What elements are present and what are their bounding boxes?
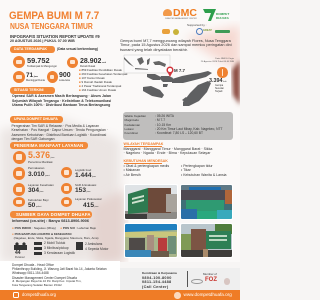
photo 3 [124,224,176,256]
map credit [200,58,234,63]
intro text: Gempa bumi M7,7 mengguncang wilayah Flores, Nusa Tenggara [120,38,231,42]
icon: logistics [61,167,72,178]
DMC wordmark: DMC [173,6,197,18]
heading: SUMBER DAYA DOMPET DHUAFA [16,212,91,217]
panel: kebutuhan mendesak [124,159,226,177]
photo 4 [181,224,232,256]
icon: instagram [12,292,18,298]
list right: • Tikar [181,168,191,172]
member heading: Member of [203,272,217,276]
food label: Permakanan [28,166,44,170]
dmc office: Kota Tangerang Selatan Banten 15412 [12,283,62,287]
psychosocial count: 415 jiwa [83,202,98,209]
list left: • Obat & perlengkapan medis [124,164,169,168]
logistics count: 1.444 jiwa [75,172,96,179]
injured label: Luka-luka [59,78,70,82]
icon: beneficiaries [12,150,26,164]
icon: rescue [61,183,72,194]
posts row: ● POS INDUK : Nagekeo (Mbay) ● POS S/U : Labuhan Bajo [12,226,96,230]
head office: Whatsapp 0811-154-4488 [12,271,49,275]
text [12,94,111,107]
damage list: ■ 164 Fasilitas Umum Rusak [79,88,116,92]
dead count: 71 jiwa [26,72,38,79]
panel: contact footer band [120,268,240,291]
personnel count: 44 [15,250,21,256]
heading: KEBUTUHAN MENDESAK [124,159,168,163]
psychosocial label: Layanan Psikososial [75,197,101,201]
logo 3 [224,278,230,284]
head office [12,262,106,275]
fact labels: Waktu Kejadian [124,114,146,118]
ambulance list: 4 Sepeda Motor [85,247,108,251]
title: GEMPA BUMI M 7.7 [9,10,99,22]
underline [124,162,162,164]
intro text [120,38,232,52]
photo grid [124,184,234,257]
logo: DMC [163,6,197,20]
panel: quake facts [123,112,233,140]
fact values: : 20 Km Timur Laut Mbay, Kab. Nagekeo, NTT [155,127,223,131]
DD wordmark [216,12,230,20]
photo 2 [181,184,232,218]
list left [124,164,169,177]
text [12,124,108,141]
handle: dompetdhuafa.org [22,292,56,297]
map credit: Data: BMKG Origin [215,58,234,60]
text: Sejumlah Wilayah Tergangu · Kelistrikan & Telekomunikasi [12,99,111,103]
heading: DATA TERDAMPAK [14,47,47,51]
fact labels: Kedalaman [124,123,140,127]
background wash [1,25,240,262]
logistics posts: ● POS BANTUAN LOGISTIK & KESEHATAN [12,232,71,236]
heading [10,211,92,218]
ambulance list [85,242,108,251]
dead label: Meninggal Dunia [26,78,45,82]
epicentre label: M 7.7 [174,68,185,72]
list right [181,164,226,177]
food count: 3.010 porsi [28,171,50,178]
shelter label: Kebutuhan Bayi [28,198,48,202]
contact heading: Kemitraan & Kerjasama [142,271,177,275]
heading [10,46,55,53]
personnel label: Personel [15,256,24,258]
panel: wilayah terdampak [124,142,212,155]
text: dengan Tim SAR Gabungan [12,137,54,141]
vehicles list: 3 Kendaraan Logistik [44,251,75,255]
list right: • Perlengkapan tidur [181,164,213,168]
shelter count: 50 paket [28,202,41,209]
logo 2 [173,28,179,34]
heading: UPAYA DOMPET DHUAFA [14,117,58,121]
beneficiaries count: 5.376 jiwa [28,150,54,160]
text: Operasi SAR & Asesmen Masih Berlangsung · Akses Jalan [12,94,111,98]
list right: • Kebutuhan Wanita & Lansia [181,173,226,177]
damage list: ■ 4 Pasar Tradisional Terdampak [79,84,121,88]
logo: Dompet Dhuafa [203,9,230,21]
logistics posts [12,232,98,240]
dmc office: Disaster Management Center Dompet Dhuafa [12,276,77,280]
text [124,147,212,155]
text: Kesehatan · Pos Hangat · Dapur Umum · Tenda Pengungsian · [12,128,108,132]
supported by: Supported by : [187,23,207,27]
fact values: : Koordinat: 7,80 LS – 120,60 BT [155,131,203,135]
note: (Data sesuai berkembang) [57,47,98,51]
aftershock label: Susulan [215,87,224,90]
fact values: : 10-15 Km [155,123,171,127]
health count: 304 jiwa [28,187,43,194]
icon: shelter [12,197,25,207]
icon: DD mark [203,9,216,21]
heading: WILAYAH TERDAMPAK [124,142,163,146]
damage list: ■ 107 Kantor Rusak [79,76,105,80]
website: www.dompetdhuafa.org [184,292,232,297]
list left: • Air Bersih [124,173,141,177]
intro text: Timur, pada 15 Agustus 2026 dan sampai memicu peringatan dini [120,43,232,47]
health label: Layanan Kesehatan [28,182,54,186]
dmc office: Jl. Menjangan Raya No.10 Pd. Ranji Kec. Ciputat Tim, [12,279,81,283]
heading [10,116,63,122]
aftershock label [215,84,224,93]
panel: sumber daya [10,211,108,258]
photo 1 [124,184,176,218]
vehicles list [44,241,75,255]
underline [124,145,162,148]
icon: injured [46,71,58,83]
displaced count: 59.752 [27,56,50,65]
damage list: ■ 9 Rumah Ibadah Rusak [79,80,112,84]
contact numbers: 0811-154-4488 [142,280,171,284]
sponsor logos [162,28,230,35]
logo 3 text: GREAT [203,29,212,32]
intro text: tsunami yang telah dinyatakan berakhir. [120,48,188,52]
icon: aftershock [217,67,228,78]
map credit: 20 Agustus 2026 Pukul 06.00 WIB [201,61,234,63]
contact numbers: 0804-100-8000 [142,276,172,280]
heading [10,142,88,149]
heading [10,87,55,94]
icon: personnel [14,242,27,250]
head office: Philanthropy Building, Jl. Warung Jati Barat No.14, Jakarta Selatan [12,267,106,271]
inset map [124,55,170,73]
DMC tagline: DISASTER MANAGEMENT CENTER [165,18,197,20]
icon: displaced [13,56,25,68]
logo 2: FOZ [205,277,217,283]
fact values: : 05:26 WITA [155,114,174,118]
logo 4 [215,30,230,33]
contact numbers [142,276,172,290]
damage list: ■ 859 Fasilitas Pendidikan Rusak [79,68,122,72]
icon: vehicle [34,242,42,255]
icon: health [12,183,25,196]
report heading: INFOGRAFIS SITUATION REPORT UPDATE #9 [10,34,100,39]
panel: upaya dompet dhuafa [10,116,108,141]
icon: web [174,292,180,298]
fact labels [124,114,146,135]
text: · Nagekeo · Ngada · Ende · Bima · Kepulauan Selayar [124,151,210,155]
text: Manggarai · Manggarai Timur · Manggarai Barat · Sikka [124,147,212,151]
icon: DMC mark [163,9,172,16]
DD wordmark: DOMPET [216,12,229,16]
icon: ambulance [76,242,83,250]
fact labels: Koordinat [124,131,138,135]
report date: 20 AGUSTUS 2026 | PUKUL 07.00 WIB [10,39,75,43]
contact line: Informasi (on-site) : Banyu 0813-8906-9006 [12,219,89,223]
subtitle: NUSA TENGGARA TIMUR [10,22,93,30]
icon: dead [13,71,25,83]
text: Asesmen Kebutuhan · Distribusi Bantuan Logistik · Koordinasi [12,133,106,137]
map [124,54,212,106]
icon: epicentre pin [167,67,173,77]
head office: Dompet Dhuafa - Head Office [12,262,54,266]
fact labels: Lokasi [124,127,133,131]
houses label: Rumah Rusak [80,64,95,68]
logo 1 [191,278,203,284]
panel: penerima manfaat layanan [10,142,102,209]
rescue label: SAR & Evakuasi [75,182,96,186]
houses count: 28.902 unit [80,58,106,65]
logistics label: Logistik food [75,168,91,172]
vehicles list: 3 Minibus/pickup [44,246,69,250]
panel: address [0,261,120,291]
panel: situasi terkini [10,87,111,107]
damage list [79,68,128,92]
DD wordmark: DHUAFA [216,16,229,20]
rescue count: 153 jiwa [75,187,90,194]
icon: psychosocial [61,197,72,207]
aftershock label: Terjadi [215,90,222,93]
logo 1 [162,29,170,34]
injured count: 900 [59,72,71,79]
list left: • Makanan [124,168,140,172]
text: Pengerahan Tim SAR & Relawan · Pos Media & Layanan [12,124,99,128]
member logos [191,277,233,286]
contact numbers: (Call Center) [142,285,168,289]
damage list: ■ 260 Fasilitas Kesehatan Terdampak [79,72,127,76]
panel: data terdampak [10,46,128,92]
vehicles list: 2 Mobil Tuktuk [44,241,65,245]
fact values: : M 7.7 [155,118,165,122]
heading: PENERIMA MANFAAT LAYANAN [14,143,83,148]
logistics posts: (Nagekeo, Ende, Sikka, Ngada, Manggarai, Maumere, Boru, Ama) [14,236,98,240]
logo 3 [196,28,203,35]
displaced label: Terdampak & Mengungsi [27,64,57,68]
icon: houses [67,56,78,68]
main islands [143,71,212,106]
dmc office [12,276,82,287]
heading: SITUASI TERKINI [14,88,44,92]
divider [186,271,188,287]
aftershock count: 3.394 kali [209,78,226,84]
icon: food [12,167,25,180]
fact labels: Magnitudo [124,118,139,122]
footer [0,290,240,300]
fact values [155,114,223,135]
ambulance list: 2 Ambulans [85,242,102,246]
beneficiaries label: Penerima Manfaat [28,160,53,164]
text: Utama Pulih 100% · Distribusi Bantuan Terus Berlangsung [12,103,110,107]
aftershock label: Gempa [215,84,223,87]
